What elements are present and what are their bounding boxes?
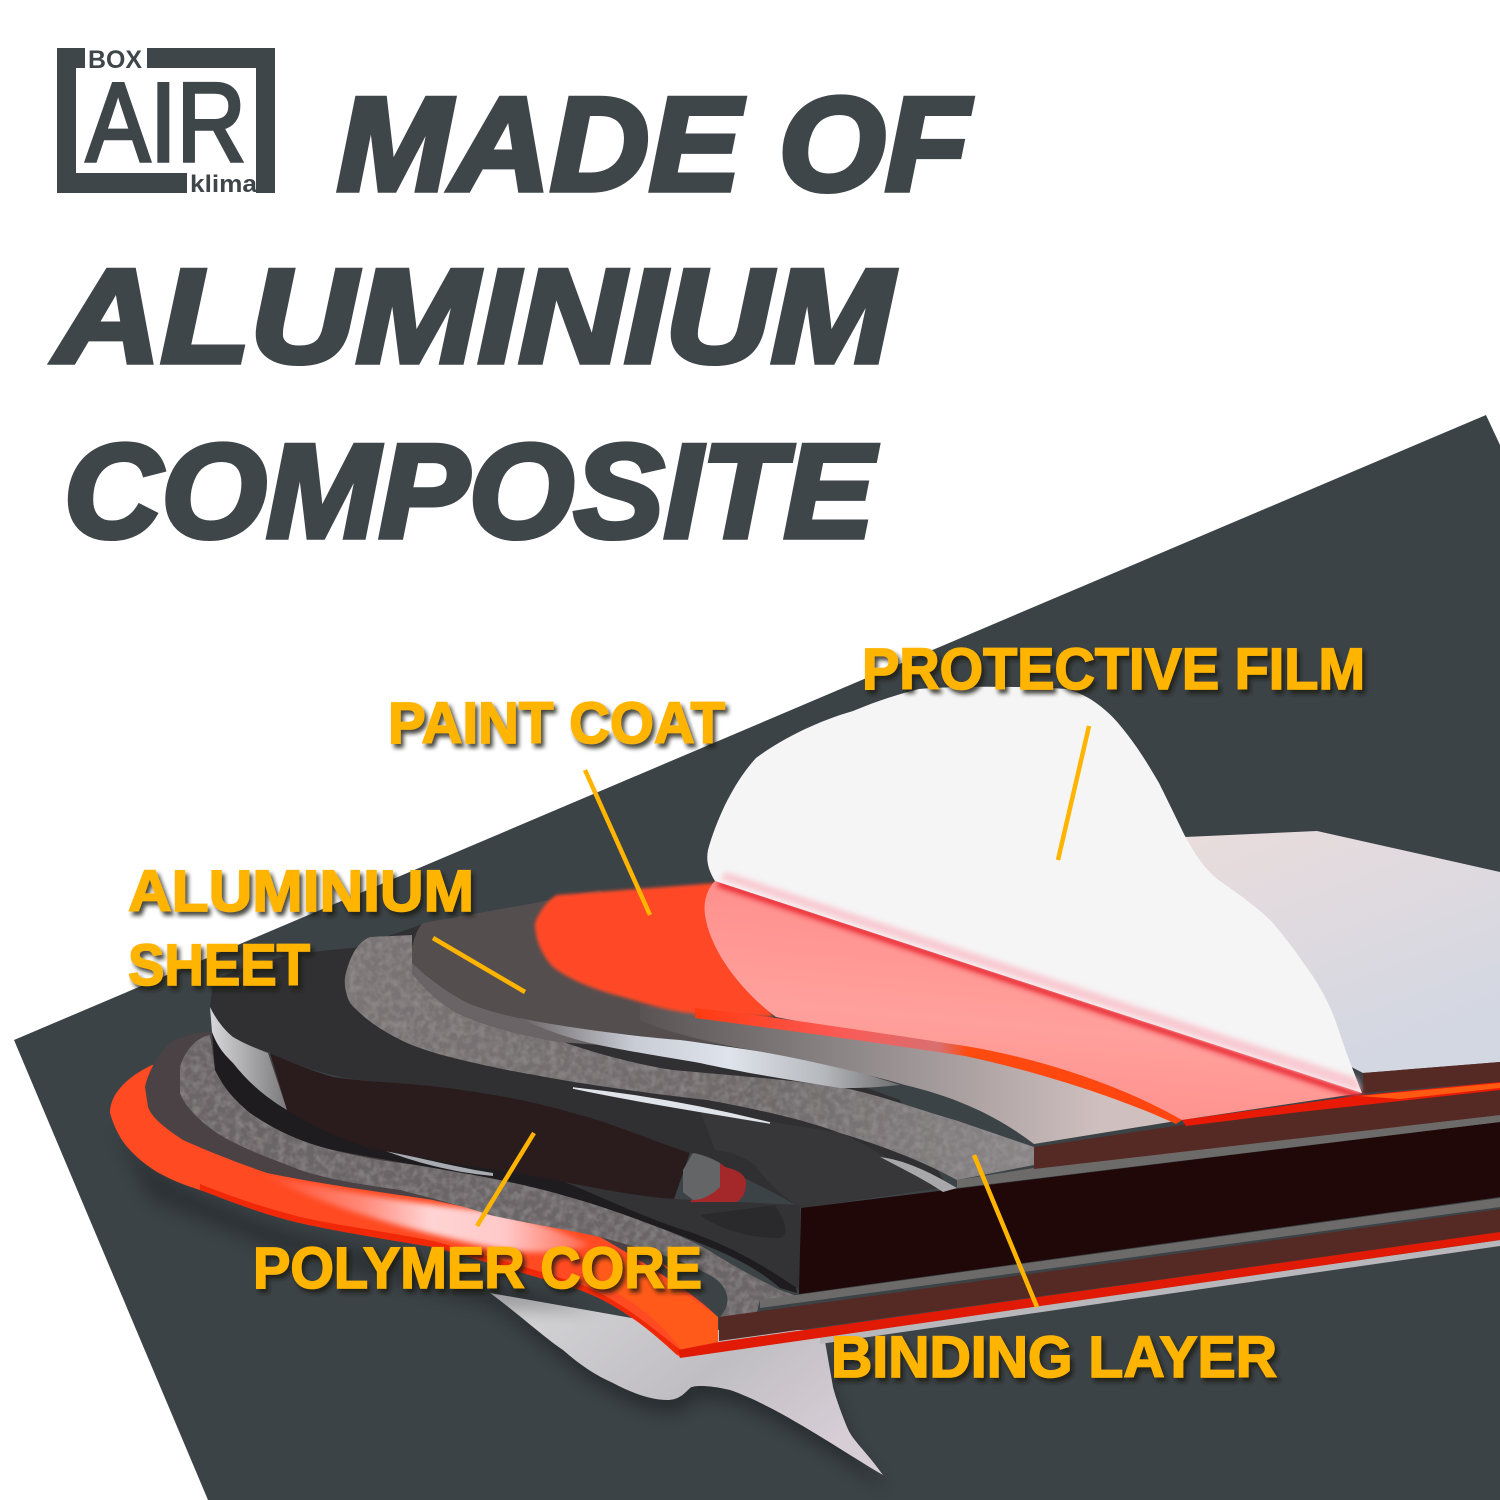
orange paint bright curve [695, 1008, 1182, 1124]
leader line: paint coat [585, 770, 650, 915]
silver top surface of sheet [640, 1005, 1182, 1144]
core front face [799, 1122, 1500, 1294]
core black lower band [212, 1032, 797, 1293]
upper right sheet surface [1180, 831, 1500, 1073]
white reflection on core [880, 1157, 957, 1192]
title: Made of Aluminium Composite: COMPOSITE [64, 418, 878, 566]
upper grey textured band (aluminium edge) [345, 935, 1034, 1180]
composite panel layers illustration [110, 687, 1500, 1489]
fold shadow line [718, 883, 1362, 1096]
dark angled background panel [14, 415, 1500, 1500]
lower front edge stack [678, 1198, 1500, 1358]
sheet side strip [412, 960, 600, 1045]
core dark surface near cut-out [560, 1180, 800, 1290]
label: aluminium sheet: SHEET [128, 933, 310, 998]
upper thin grey edge [957, 1115, 1500, 1188]
label: polymer core: POLYMER CORE [253, 1236, 702, 1301]
core light top surface [700, 1110, 947, 1208]
logo: Box Air Klima: AIR [86, 60, 246, 185]
polymer core top surface [210, 925, 947, 1208]
orange paint coat surface [535, 883, 773, 1017]
pink paint surface under film [705, 881, 1362, 1120]
upper dark aluminium sheet [412, 890, 860, 1070]
core inner cut-out [683, 1153, 746, 1202]
label: protective film: PROTECTIVE FILM [862, 637, 1365, 702]
bottom orange paint layer [110, 1060, 718, 1357]
leader line: aluminium sheet [433, 938, 525, 992]
core darker blob [700, 1205, 785, 1238]
label: paint coat: PAINT COAT [388, 691, 725, 756]
lower grey textured binding band [180, 1035, 800, 1317]
upper white streak [573, 1088, 770, 1123]
shadow of the orange layer [110, 1123, 600, 1310]
label: binding layer: BINDING LAYER [831, 1325, 1277, 1390]
upper front brown edge [1034, 1062, 1500, 1169]
protective film [707, 687, 1362, 1093]
core lower white streak [383, 1150, 493, 1176]
core side face [270, 1053, 690, 1199]
bottom white film edge line [820, 1240, 1500, 1344]
leader line: protective film [1058, 726, 1089, 860]
title: Made of Aluminium Composite: MADE OF [337, 71, 973, 219]
lower peeled film tail [490, 1293, 887, 1489]
logo: Box Air Klima: klima [190, 171, 258, 198]
metallic shine band [520, 1018, 900, 1088]
core rounded bright cap [210, 1007, 287, 1110]
label: aluminium sheet: ALUMINIUM [128, 859, 474, 924]
bottom dark backing layer [145, 1032, 718, 1317]
title: Made of Aluminium Composite: ALUMINIUM [52, 243, 897, 391]
leader line: polymer core [477, 1133, 534, 1226]
title: Made of Aluminium Composite [52, 71, 973, 566]
logo: Box Air Klima: BOX [88, 46, 142, 74]
leader line: binding layer [974, 1155, 1037, 1307]
label: aluminium sheet [128, 859, 474, 998]
